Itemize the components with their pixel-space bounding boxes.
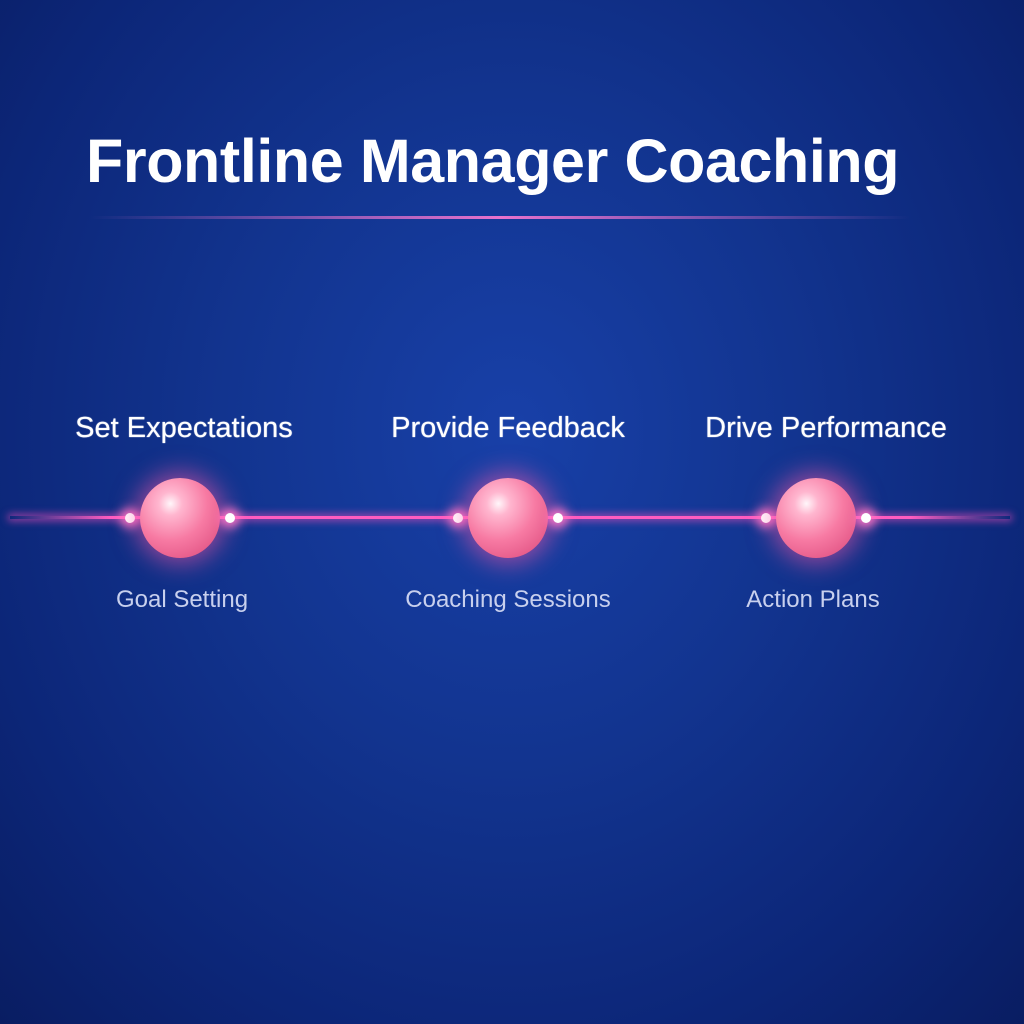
title underline — [90, 216, 910, 219]
step 2 label: Coaching Sessions — [405, 586, 611, 613]
step 3 label: Action Plans — [746, 586, 880, 613]
step 2 heading: Provide Feedback — [391, 412, 625, 444]
timeline line — [10, 516, 1010, 519]
title: Frontline Manager Coaching — [86, 127, 899, 195]
step 1 label: Goal Setting — [116, 586, 248, 613]
step 1 heading: Set Expectations — [75, 412, 293, 444]
step 1 node — [113, 456, 247, 580]
step 2 node — [441, 456, 575, 580]
step 3 heading: Drive Performance — [705, 412, 947, 444]
step 3 node — [749, 456, 883, 580]
